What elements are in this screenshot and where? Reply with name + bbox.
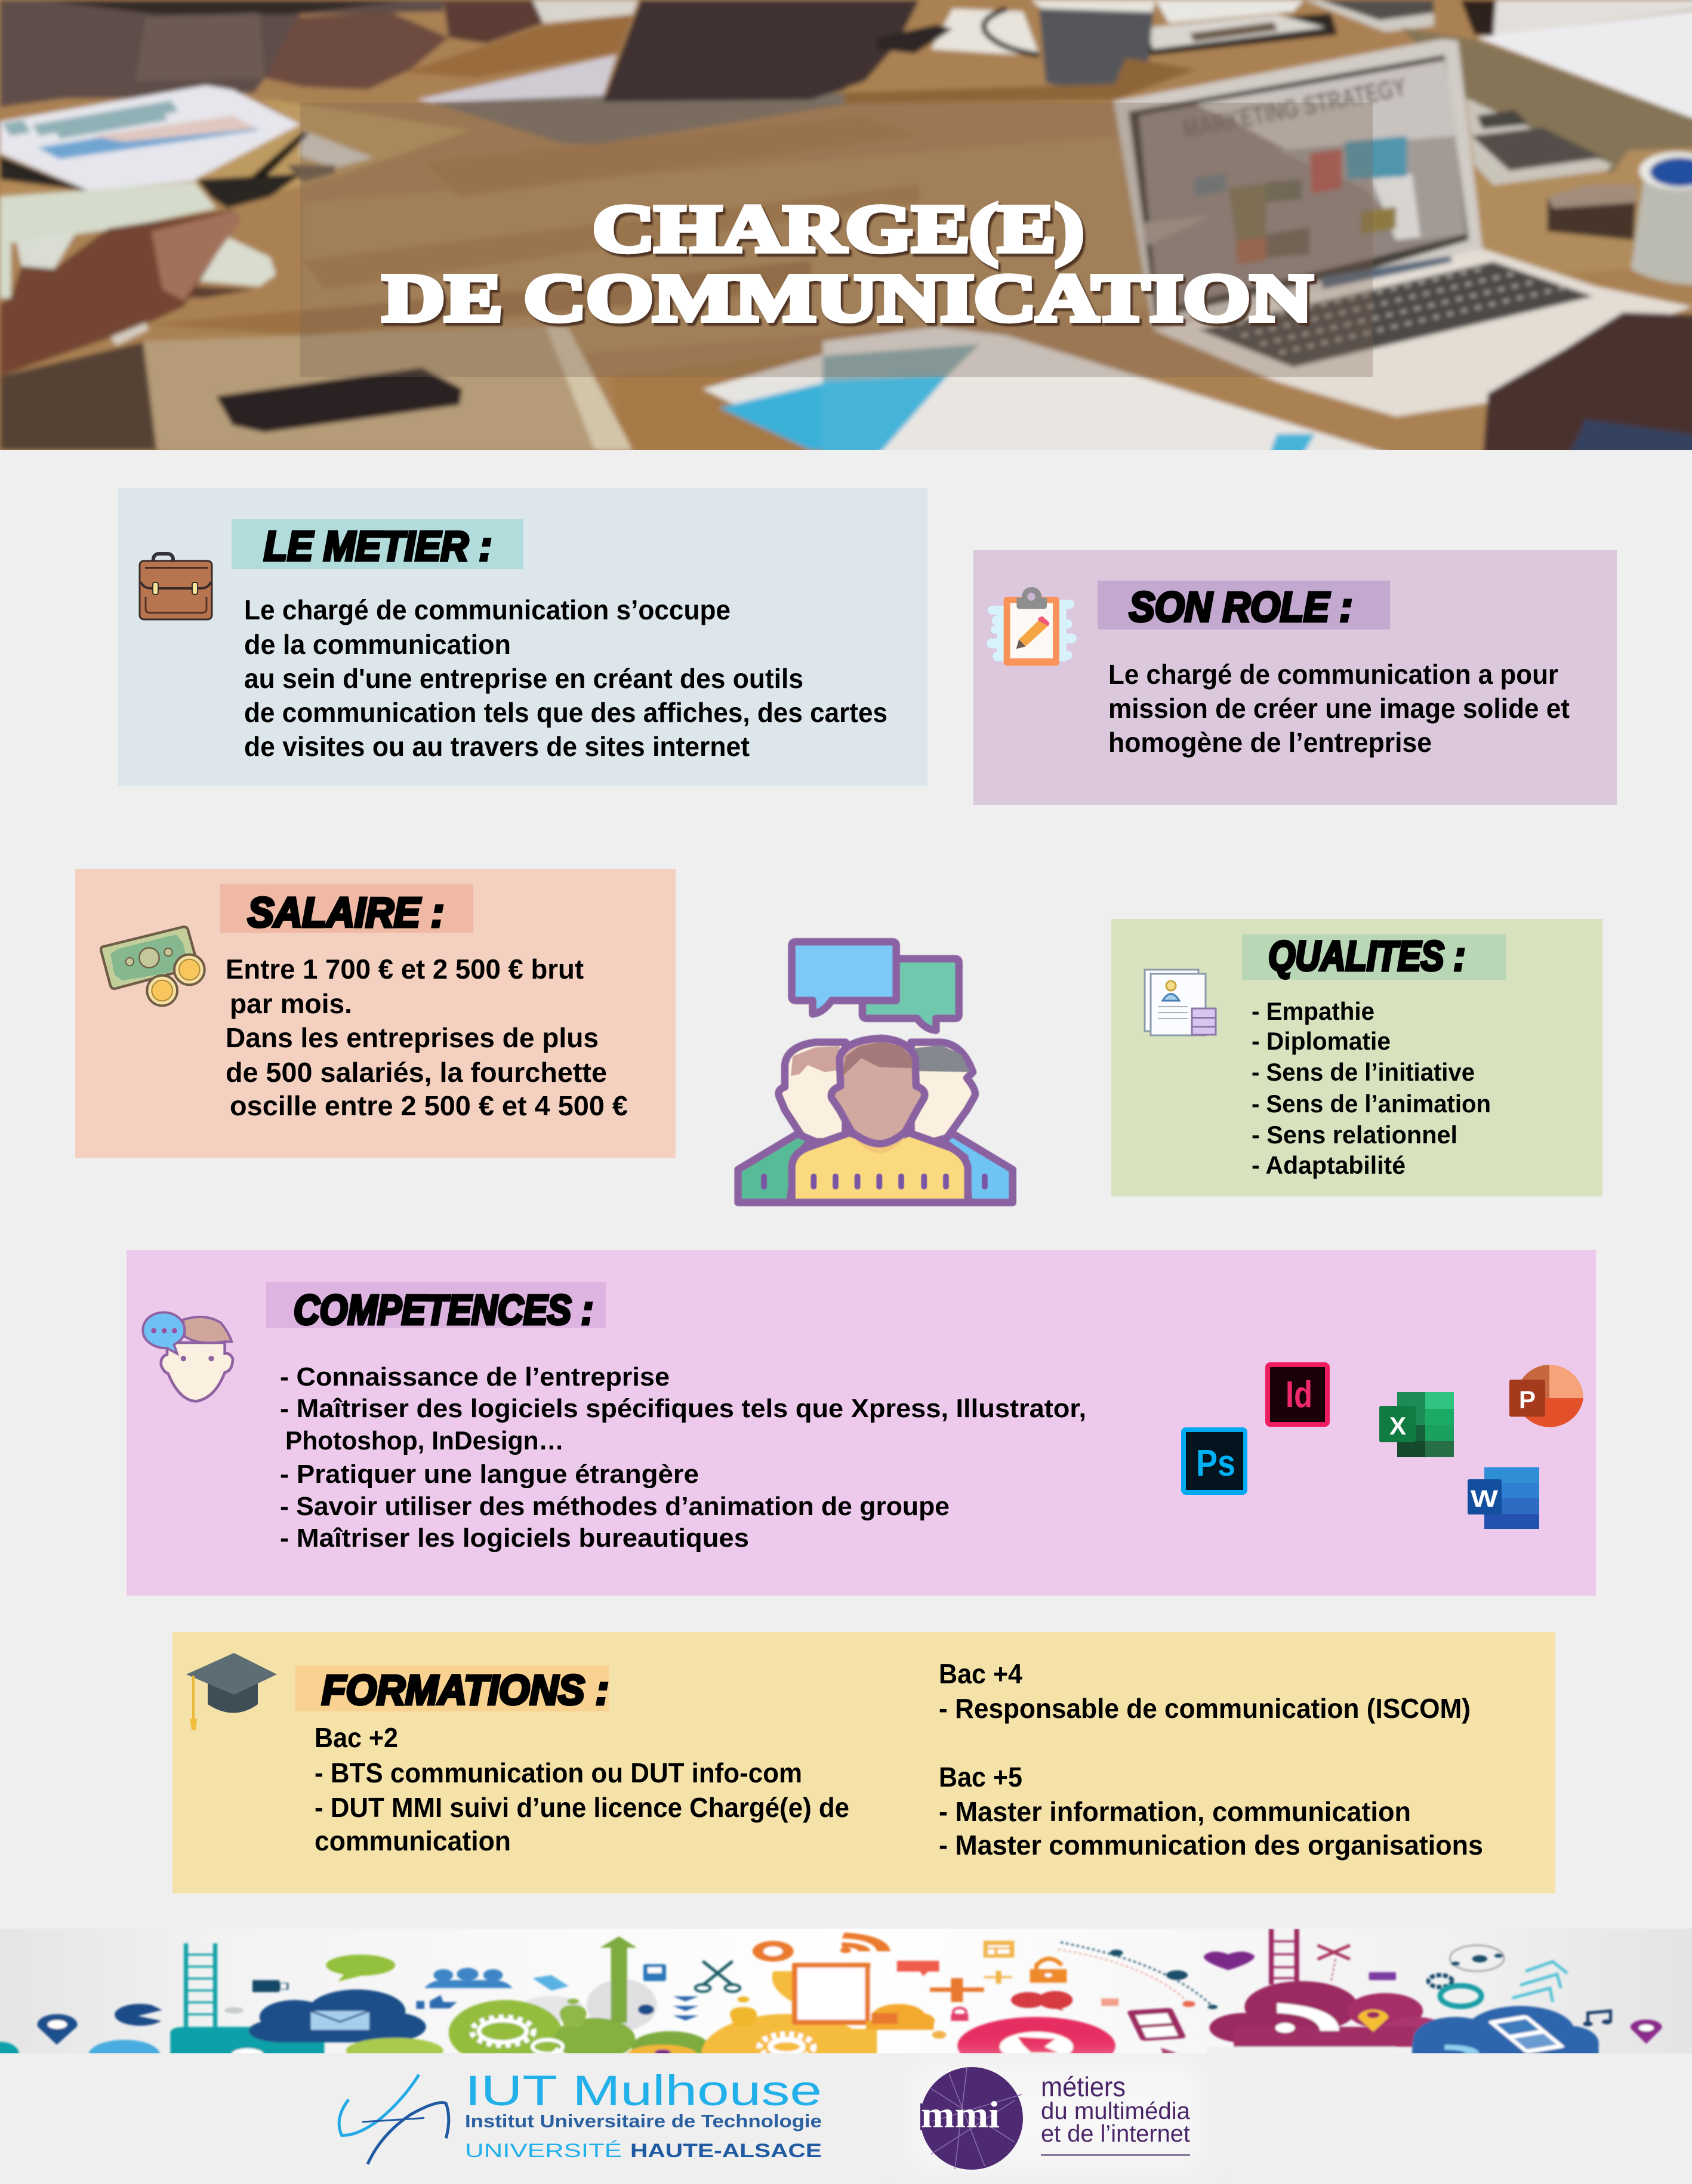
text: qualites list: - Empathie (1252, 997, 1374, 1025)
logo text: IUT Mulhouse (465, 2068, 822, 2115)
manila folder (195, 98, 470, 191)
notebook (823, 327, 1417, 463)
text: competences list: - Pratiquer une langue étrangère (280, 1460, 699, 1489)
icon: Adobe Photoshop: Ps (1196, 1443, 1235, 1484)
text: competences list (280, 1362, 1086, 1553)
lower left (0, 341, 157, 450)
text: formations bac +4 and +5: - Master information, communication (939, 1796, 1411, 1827)
heading: formations: FORMATIONS : (322, 1667, 609, 1713)
icon: Microsoft Word (1468, 1467, 1539, 1529)
icon: clipboard and pencil (987, 587, 1077, 666)
panel: son role (973, 550, 1617, 805)
text: formations bac +2: - DUT MMI suivi d’une licence Chargé(e) de (315, 1792, 849, 1823)
calculator (1466, 98, 1612, 185)
logo: mmi metiers du multimedia et de l'internet (913, 2065, 1200, 2170)
text: formations bac +2: communication (315, 1825, 511, 1856)
text: formations bac +2 (315, 1722, 849, 1856)
text: le metier (244, 594, 887, 762)
text: competences list: Photoshop, InDesign… (285, 1426, 564, 1455)
text: salaire: oscille entre 2 500 € et 4 500 € (230, 1090, 628, 1121)
text: formations bac +2: - BTS communication ou DUT info-com (315, 1757, 802, 1788)
text: salaire: Dans les entreprises de plus (226, 1022, 599, 1053)
text: son role: mission de créer une image solide et (1108, 693, 1570, 724)
logo: mmi metiers du multimedia et de l'internet: du multimédia (1041, 2098, 1191, 2124)
title: DE COMMUNICATION (383, 261, 1312, 335)
heading: son role: SON ROLE : (1129, 584, 1352, 630)
heading: competences: COMPETENCES : (294, 1287, 593, 1333)
banner: illustrated communication icons (0, 1929, 1692, 2096)
text: son role: homogène de l’entreprise (1108, 727, 1432, 758)
mmi disc: mmi (921, 2093, 1000, 2136)
icon: graduation cap (186, 1653, 277, 1730)
icon: Adobe Photoshop (1181, 1427, 1247, 1495)
logo: IUT Mulhouse: UNIVERSITÉ (465, 2140, 622, 2161)
text: formations bac +4 and +5: Bac +5 (939, 1762, 1022, 1793)
text: qualites list (1252, 997, 1491, 1179)
text: qualites list: - Sens relationnel (1252, 1121, 1457, 1149)
hand left (0, 209, 241, 376)
panel: competences (127, 1250, 1596, 1596)
paper with chart (0, 85, 300, 191)
header photo: desk with laptops: MARKETING STRATEGY (1181, 72, 1409, 144)
text: formations bac +4 and +5: - Responsable de communication (ISCOM) (939, 1693, 1471, 1724)
top right objects (830, 85, 846, 94)
sleeve (0, 0, 443, 107)
hand top (265, 11, 449, 90)
icon: Microsoft Excel: X (1389, 1412, 1406, 1440)
heading: le metier: LE METIER : (264, 523, 492, 569)
text: competences list: - Maîtriser les logiciels bureautiques (280, 1523, 749, 1553)
table strip (405, 14, 633, 78)
title: CHARGE(E) (593, 192, 1084, 266)
text: qualites list: - Sens de l’animation (1252, 1090, 1491, 1118)
text: formations bac +4 and +5 (939, 1658, 1483, 1861)
text: qualites list: - Adaptabilité (1252, 1151, 1406, 1179)
logo: IUT Mulhouse: Institut Universitaire de Technologie (465, 2111, 822, 2131)
text: salaire (226, 954, 628, 1121)
logo: mmi metiers du multimedia et de l'internet: et de l’internet (1041, 2121, 1190, 2147)
text: le metier: de communication tels que des affiches, des cartes (244, 697, 887, 728)
icon: Adobe InDesign: Id (1286, 1374, 1312, 1415)
panel: le metier (118, 488, 927, 786)
text: le metier: de visites ou au travers de sites internet (244, 731, 750, 762)
panel: formations (172, 1632, 1555, 1893)
panel: qualites (1111, 919, 1602, 1196)
text: salaire: par mois. (230, 988, 352, 1019)
logo mark (339, 2075, 449, 2164)
text: salaire: Entre 1 700 € et 2 500 € brut (226, 954, 584, 985)
notebook part left (701, 351, 826, 408)
text: formations bac +2: Bac +2 (315, 1722, 398, 1753)
icon: Adobe InDesign (1265, 1362, 1330, 1427)
header photo: desk with laptops (0, 0, 1692, 489)
laptop centre (416, 55, 617, 112)
icon: face with speech bubble (143, 1312, 233, 1401)
heading: qualites: QUALITES : (1268, 933, 1465, 979)
text: competences list: - Connaissance de l’entreprise (280, 1362, 670, 1392)
icon: group of people with speech bubbles (738, 942, 1013, 1202)
mmi disc (920, 2067, 1023, 2170)
text: qualites list: - Diplomatie (1252, 1027, 1391, 1055)
laptop screen (1114, 39, 1483, 327)
logo: IUT Mulhouse (339, 2068, 822, 2164)
text: le metier: au sein d'une entreprise en créant des outils (244, 663, 803, 694)
mug (984, 9, 1039, 55)
text: le metier: Le chargé de communication s’occupe (244, 594, 731, 625)
icon: Microsoft Word: W (1471, 1486, 1498, 1512)
right mug and stone (1548, 185, 1636, 240)
header translucent overlay (300, 103, 1373, 377)
text: salaire: de 500 salariés, la fourchette (226, 1057, 607, 1088)
text: formations bac +4 and +5: Bac +4 (939, 1658, 1022, 1689)
panel: salaire (75, 869, 676, 1158)
right hand (1483, 312, 1692, 463)
icon: Microsoft PowerPoint (1509, 1365, 1583, 1427)
text: son role (1108, 659, 1570, 758)
icon: Microsoft PowerPoint: P (1519, 1386, 1536, 1414)
icon: briefcase (140, 554, 212, 619)
title (383, 192, 1312, 335)
logo: IUT Mulhouse: HAUTE-ALSACE (630, 2140, 822, 2161)
text: formations bac +4 and +5: - Master communication des organisations (939, 1830, 1483, 1861)
mmi text: métiers (1041, 2071, 1126, 2102)
heading: salaire: SALAIRE : (248, 889, 444, 936)
text: competences list: - Savoir utiliser des méthodes d’animation de groupe (280, 1492, 950, 1521)
text: son role: Le chargé de communication a pour (1108, 659, 1558, 690)
text: le metier: de la communication (244, 629, 511, 660)
laptop base (1152, 249, 1692, 417)
text: qualites list: - Sens de l’initiative (1252, 1058, 1475, 1086)
icon: Microsoft Excel (1379, 1392, 1454, 1457)
text: competences list: - Maîtriser des logiciels spécifiques tels que Xpress, Illustrator, (280, 1394, 1086, 1423)
pale mug (0, 182, 216, 298)
icon: banknote and coins (101, 927, 205, 1005)
icon: CV document (1145, 970, 1216, 1035)
wood tones (1476, 150, 1692, 272)
